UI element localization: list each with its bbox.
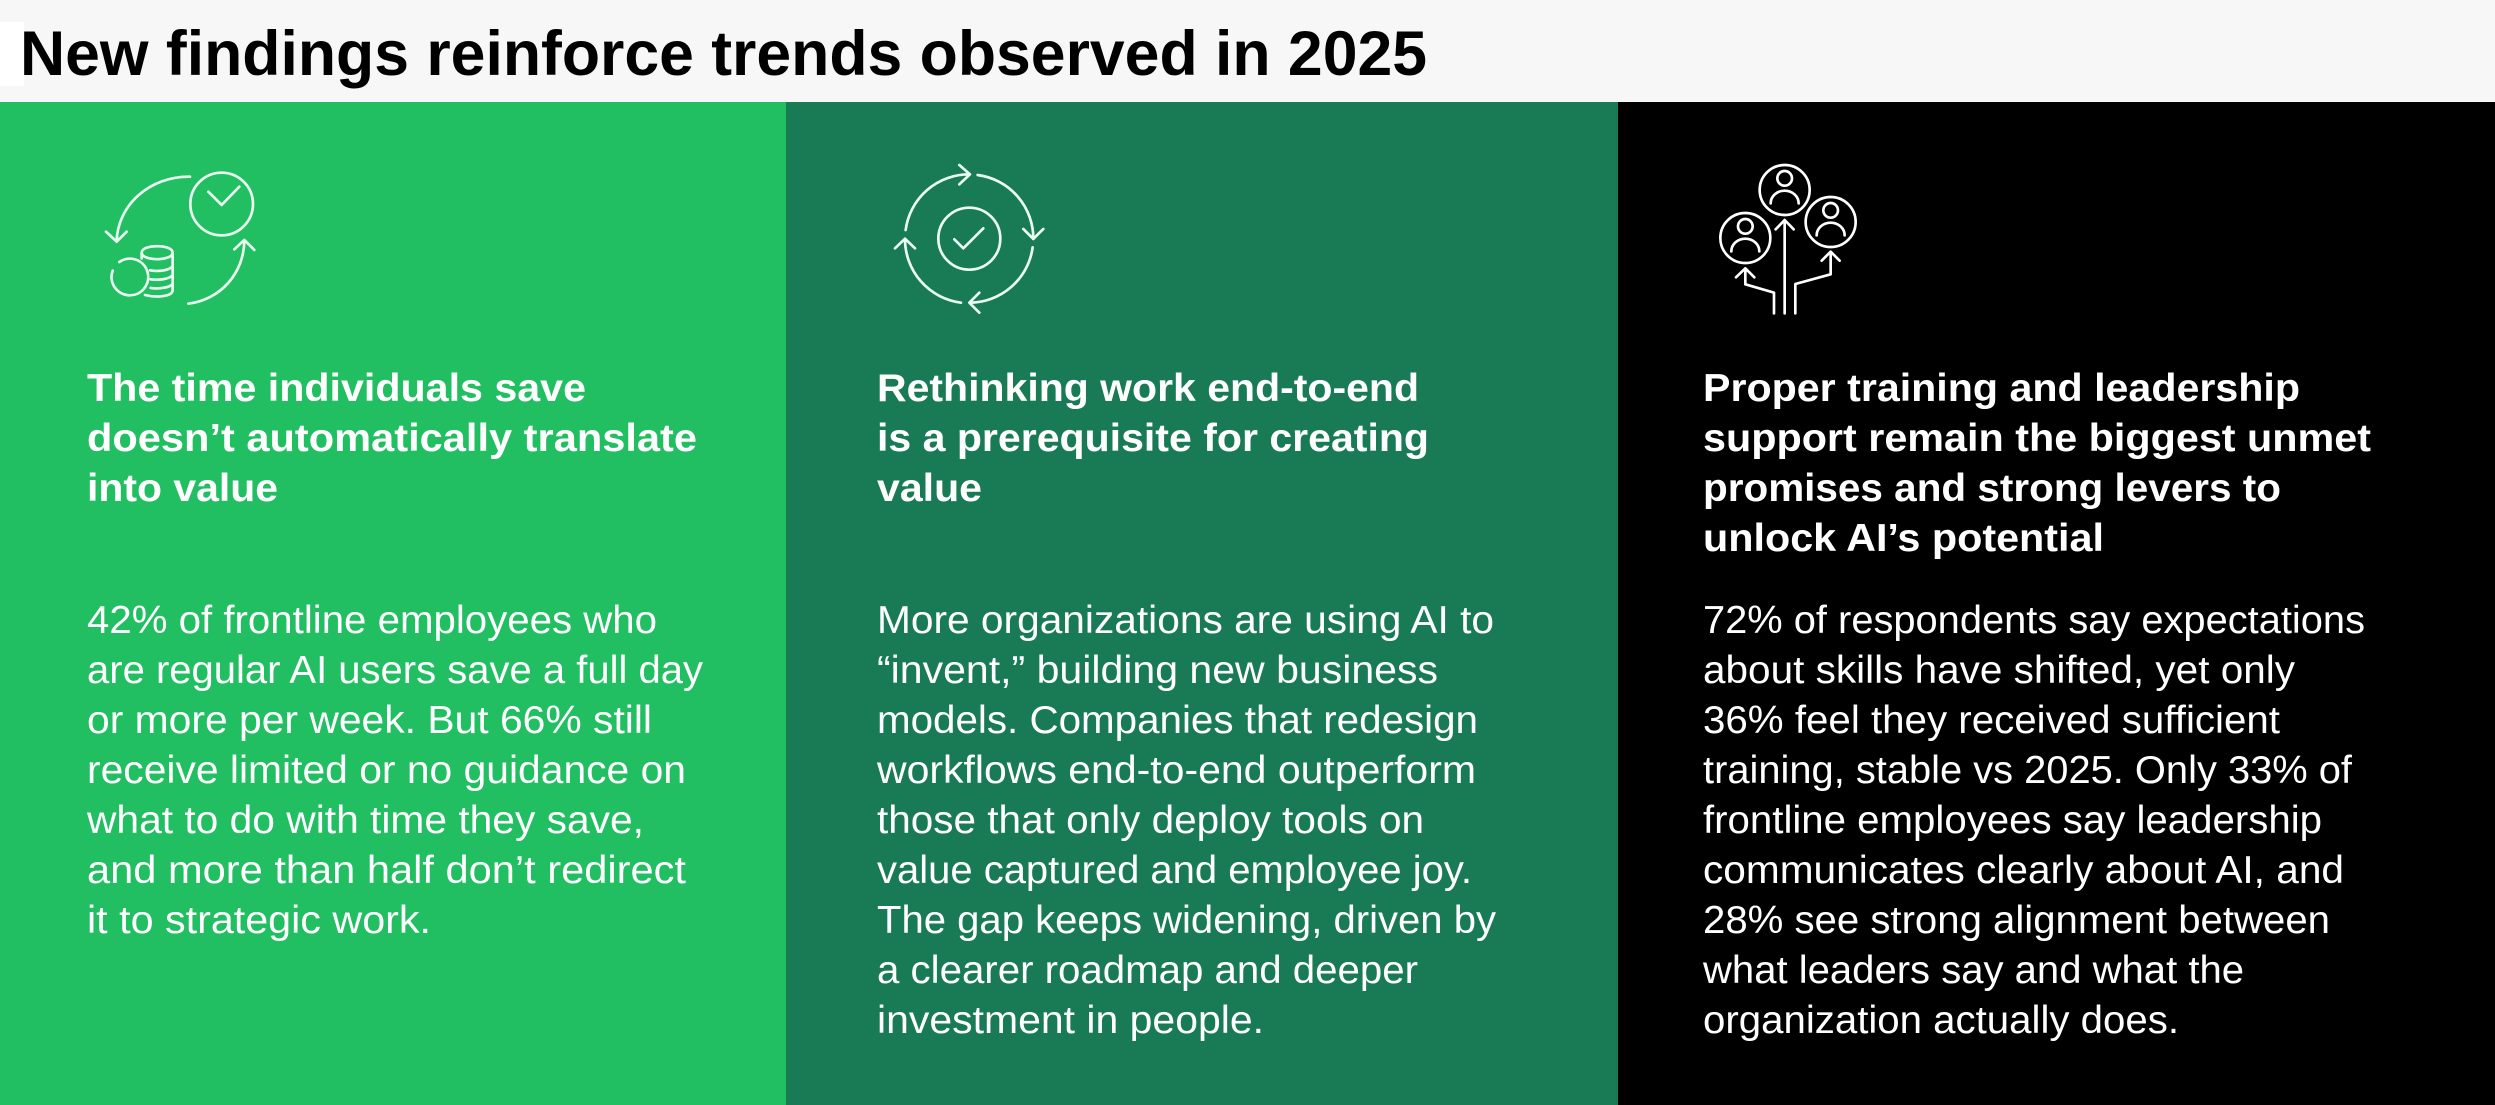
body text: training and leadership: training, stable vs 2025. Only 33% of	[1703, 749, 2352, 792]
body text: rethinking work: The gap keeps widening, driven by	[877, 899, 1497, 942]
panel: time savings	[0, 102, 786, 1105]
body text: time savings: what to do with time they save,	[86, 799, 644, 842]
body text: time savings: or more per week. But 66% still	[87, 699, 652, 742]
heading: time savings: into value	[87, 467, 278, 510]
body text: time savings: and more than half don’t redirect	[87, 849, 686, 892]
heading: training and leadership: support remain the biggest unmet	[1703, 417, 2371, 460]
icon: clock and coins cycle	[106, 173, 254, 304]
heading: time savings	[87, 367, 697, 510]
body text: training and leadership	[1702, 599, 2365, 1042]
heading: time savings: The time individuals save	[87, 367, 586, 410]
body text: rethinking work: those that only deploy tools on	[877, 799, 1424, 842]
body text: rethinking work: investment in people.	[877, 999, 1264, 1042]
heading: rethinking work	[877, 367, 1429, 510]
panel: rethinking work	[786, 102, 1618, 1105]
body text: training and leadership: 36% feel they received sufficient	[1703, 699, 2280, 742]
heading: training and leadership: unlock AI’s potential	[1703, 517, 2104, 560]
body text: rethinking work: workflows end-to-end outperform	[876, 749, 1476, 792]
body text: training and leadership: organization actually does.	[1703, 999, 2179, 1042]
heading: rethinking work: Rethinking work end-to-end	[877, 367, 1419, 410]
icon: cycle with check mark	[895, 165, 1043, 313]
heading: training and leadership: Proper training and leadership	[1703, 367, 2300, 410]
icon: people with rising arrows	[1720, 165, 1856, 313]
body text: rethinking work: a clearer roadmap and deeper	[877, 949, 1418, 992]
body text: rethinking work: value captured and employee joy.	[877, 849, 1472, 892]
body text: rethinking work	[876, 599, 1497, 1042]
body text: time savings: 42% of frontline employees who	[87, 599, 657, 642]
body text: training and leadership: 72% of respondents say expectations	[1703, 599, 2365, 642]
heading: rethinking work: is a prerequisite for creating	[877, 417, 1429, 460]
body text: rethinking work: More organizations are using AI to	[877, 599, 1494, 642]
body text: time savings: are regular AI users save a full day	[87, 649, 704, 692]
heading: training and leadership	[1703, 367, 2371, 560]
body text: rethinking work: “invent,” building new business	[877, 649, 1438, 692]
body text: training and leadership: frontline employees say leadership	[1703, 799, 2322, 842]
body text: training and leadership: about skills have shifted, yet only	[1703, 649, 2296, 692]
body text: training and leadership: communicates clearly about AI, and	[1703, 849, 2344, 892]
title: New findings reinforce trends observed in 2025	[20, 19, 1427, 89]
body text: time savings: it to strategic work.	[87, 899, 431, 942]
panel: training and leadership	[1618, 102, 2495, 1105]
body text: training and leadership: what leaders say and what the	[1702, 949, 2244, 992]
body text: time savings: receive limited or no guidance on	[87, 749, 686, 792]
heading: time savings: doesn’t automatically translate	[87, 417, 697, 460]
body text: rethinking work: models. Companies that redesign	[877, 699, 1478, 742]
heading: rethinking work: value	[877, 467, 982, 510]
body text: training and leadership: 28% see strong alignment between	[1703, 899, 2330, 942]
heading: training and leadership: promises and strong levers to	[1703, 467, 2281, 510]
body text: time savings	[86, 599, 704, 942]
